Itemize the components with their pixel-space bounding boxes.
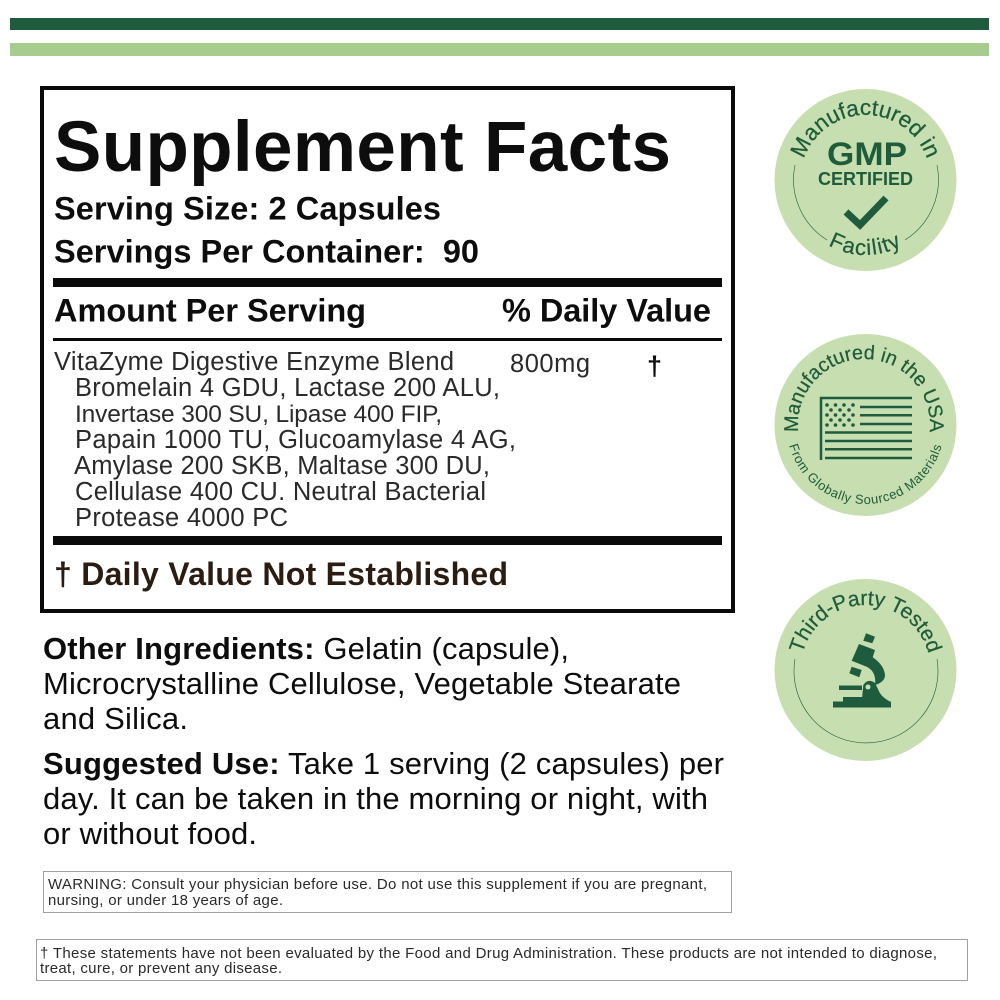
badge text: from globally sourced materials: From Globally Sourced Materials — [789, 444, 942, 504]
icon: microscope — [833, 633, 891, 708]
suggested use text: day. It can be taken in the morning or night, with — [43, 781, 708, 816]
suggested use text — [43, 746, 724, 851]
enzyme blend ingredient list: Papain 1000 TU, Glucoamylase 4 AG, — [75, 426, 516, 454]
enzyme blend ingredient list: VitaZyme Digestive Enzyme Blend — [54, 348, 454, 376]
badge text: manufactured in: Manufactured in — [790, 100, 937, 158]
blend amount: 800mg — [510, 350, 590, 378]
dagger: † — [647, 351, 662, 381]
other ingredients text: Microcrystalline Cellulose, Vegetable Stearate — [43, 666, 681, 701]
badge text: third-party tested: Third-Party Tested — [788, 592, 943, 653]
FDA disclaimer box: treat, cure, or prevent any disease. — [40, 960, 282, 977]
enzyme blend ingredient list: Invertase 300 SU, Lipase 400 FIP, — [75, 401, 442, 428]
icon: check mark — [846, 198, 886, 225]
suggested use text: Suggested Use: Take 1 serving (2 capsules) per — [43, 746, 724, 781]
icon: american flag — [821, 398, 912, 460]
enzyme blend ingredient list: Bromelain 4 GDU, Lactase 200 ALU, — [75, 374, 500, 402]
panel: supplement facts — [42, 88, 733, 611]
daily value footnote: † Daily Value Not Established — [54, 556, 508, 592]
badge text: GMP: GMP — [827, 136, 907, 172]
warning box: nursing, or under 18 years of age. — [48, 892, 283, 909]
serving information — [54, 190, 479, 270]
badge: GMP certified — [774, 89, 956, 271]
FDA disclaimer box: † These statements have not been evaluated by the Food and Drug Administration. These products are not intended to diagnose, — [40, 945, 937, 962]
warning box — [44, 872, 732, 912]
serving information: Serving Size: 2 Capsules — [54, 190, 441, 226]
enzyme blend ingredient list — [54, 348, 516, 532]
enzyme blend ingredient list: Protease 4000 PC — [75, 504, 288, 532]
serving information: Servings Per Container: 90 — [54, 234, 479, 270]
warning box: WARNING: Consult your physician before use. Do not use this supplement if you are pregnant, — [48, 876, 707, 893]
enzyme blend ingredient list: Cellulase 400 CU. Neutral Bacterial — [75, 478, 486, 506]
badge: manufactured in the USA — [774, 334, 956, 516]
table header: Amount Per Serving — [54, 292, 366, 328]
FDA disclaimer box — [36, 940, 968, 980]
heading: supplement facts: Supplement Facts — [54, 108, 671, 187]
badge text: manufactured in the USA: Manufactured in the USA — [784, 344, 944, 432]
badge text: certified: CERTIFIED — [818, 169, 913, 189]
other ingredients text — [43, 631, 681, 736]
table header — [54, 292, 711, 328]
suggested use text: or without food. — [43, 816, 257, 851]
table header: % Daily Value — [502, 292, 711, 328]
badge: third-party tested — [774, 579, 956, 761]
badge text: facility: Facility — [830, 232, 898, 256]
enzyme blend ingredient list: Amylase 200 SKB, Maltase 300 DU, — [74, 452, 490, 480]
other ingredients text: and Silica. — [43, 701, 188, 736]
other ingredients text: Other Ingredients: Gelatin (capsule), — [43, 631, 569, 666]
top light green bar — [10, 43, 989, 56]
top dark green bar — [10, 18, 989, 30]
